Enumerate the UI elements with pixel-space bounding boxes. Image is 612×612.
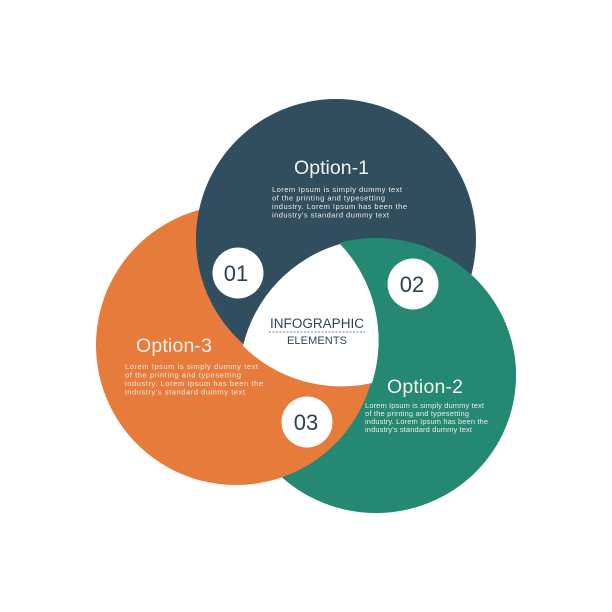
option 1 text: industry. Lorem Ipsum has been the — [272, 202, 407, 211]
badge 03: 03 — [294, 410, 318, 435]
option 3 text — [125, 335, 263, 396]
infographic: three overlapping option circles — [96, 99, 516, 513]
center white pinwheel shape — [243, 244, 379, 386]
badge 01 — [212, 248, 264, 298]
green upper part over dark blue — [340, 238, 516, 383]
option 3 text: industry. Lorem Ipsum has been the — [125, 379, 263, 388]
option 2 text: of the printing and typesetting — [365, 409, 469, 418]
option 1 text: industry's standard dummy text — [272, 210, 390, 220]
option 1 text: of the printing and typesetting — [272, 194, 385, 202]
center title: ELEMENTS — [287, 335, 347, 347]
center title — [269, 316, 365, 347]
center title: INFOGRAPHIC — [270, 316, 364, 331]
circle: orange option 3 — [96, 205, 376, 485]
option 3 text: of the printing and typesetting — [125, 370, 241, 380]
option 2 text: Lorem Ipsum is simply dummy text — [365, 401, 485, 410]
circle: dark blue option 1 — [196, 99, 476, 379]
badge 02 — [388, 258, 438, 310]
badge 01: 01 — [224, 261, 248, 286]
option 1 text: Lorem Ipsum is simply dummy text — [272, 185, 403, 194]
option 2 text: industry. Lorem Ipsum has been the — [365, 417, 488, 426]
option 1 text: Option-1 — [294, 157, 369, 179]
option 3 text: Lorem Ipsum is simply dummy text — [125, 362, 259, 371]
option 2 text — [365, 376, 488, 434]
circle: green option 2 — [236, 238, 516, 513]
option 3 text: Option-3 — [136, 335, 212, 357]
option 2 text: industry's standard dummy text — [365, 425, 473, 434]
option 3 text: industry's standard dummy text — [125, 388, 246, 396]
badge 03 — [282, 396, 332, 448]
badge 02: 02 — [400, 272, 424, 297]
option 2 text: Option-2 — [387, 376, 463, 398]
option 1 text — [272, 157, 407, 220]
